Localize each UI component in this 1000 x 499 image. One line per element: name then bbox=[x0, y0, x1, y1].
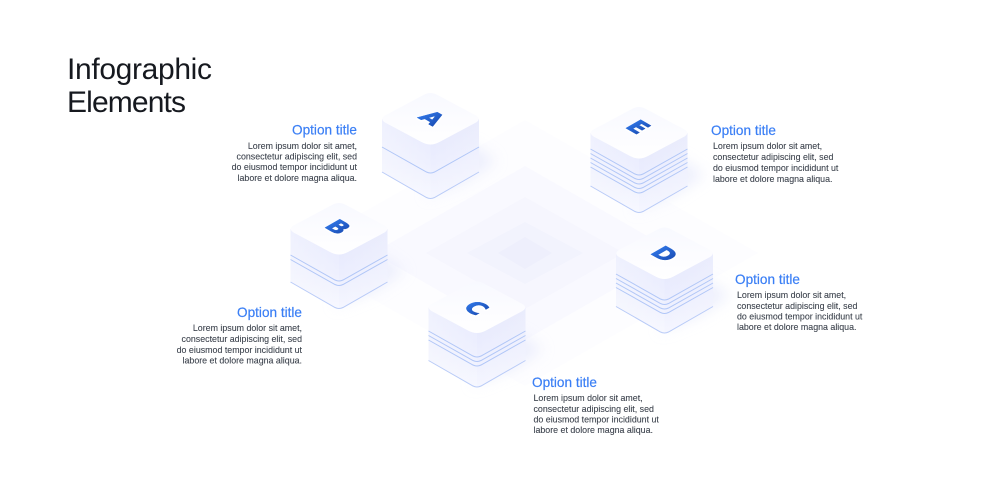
title: Elements bbox=[67, 86, 186, 119]
cube B: B bbox=[318, 217, 356, 238]
option D text: do eiusmod tempor incididunt ut bbox=[737, 312, 863, 322]
option E text bbox=[711, 123, 839, 184]
cube A: A bbox=[412, 109, 450, 131]
cube C bbox=[428, 282, 543, 387]
title bbox=[67, 53, 212, 119]
option C text: consectetur adipiscing elit, sed bbox=[534, 404, 654, 414]
option E text: Lorem ipsum dolor sit amet, bbox=[713, 141, 822, 151]
central layered diamond platform bbox=[292, 120, 758, 386]
option B text: Lorem ipsum dolor sit amet, bbox=[193, 323, 302, 333]
option B text: Option title bbox=[237, 305, 302, 320]
option A text: consectetur adipiscing elit, sed bbox=[237, 152, 357, 162]
cube E: E bbox=[619, 118, 655, 139]
option E text: labore et dolore magna aliqua. bbox=[713, 174, 832, 184]
cube C: C bbox=[456, 299, 494, 320]
option C text: do eiusmod tempor incididunt ut bbox=[534, 414, 659, 424]
option A text: do eiusmod tempor incididunt ut bbox=[232, 162, 358, 172]
option A text: labore et dolore magna aliqua. bbox=[238, 173, 357, 183]
option D text: consectetur adipiscing elit, sed bbox=[737, 301, 858, 311]
option A text: Lorem ipsum dolor sit amet, bbox=[248, 141, 357, 151]
cube D: D bbox=[644, 243, 683, 266]
option E text: Option title bbox=[711, 123, 776, 138]
option C text: labore et dolore magna aliqua. bbox=[534, 425, 653, 435]
cube A: A bbox=[412, 108, 450, 130]
cube B: B bbox=[318, 218, 356, 239]
option B text: consectetur adipiscing elit, sed bbox=[182, 334, 302, 344]
option B text: labore et dolore magna aliqua. bbox=[183, 356, 302, 366]
option D text: labore et dolore magna aliqua. bbox=[737, 322, 856, 332]
option D text: Lorem ipsum dolor sit amet, bbox=[737, 290, 846, 300]
cube B bbox=[290, 203, 405, 308]
option E text: do eiusmod tempor incididunt ut bbox=[713, 163, 839, 173]
cube E: E bbox=[619, 117, 655, 138]
option B text bbox=[177, 305, 303, 366]
option D text bbox=[735, 272, 863, 332]
cube D: D bbox=[644, 244, 683, 267]
cube A bbox=[382, 93, 496, 198]
option D text: Option title bbox=[735, 272, 800, 287]
option C text: Option title bbox=[532, 375, 597, 390]
option C text bbox=[532, 375, 659, 435]
cube E bbox=[590, 107, 705, 212]
cube C: C bbox=[456, 298, 494, 319]
option B text: do eiusmod tempor incididunt ut bbox=[177, 345, 303, 355]
option A text: Option title bbox=[292, 122, 357, 138]
option C text: Lorem ipsum dolor sit amet, bbox=[534, 393, 643, 403]
cube D bbox=[616, 228, 730, 333]
option A text bbox=[232, 122, 358, 183]
option E text: consectetur adipiscing elit, sed bbox=[713, 152, 834, 162]
title: Infographic bbox=[67, 53, 212, 86]
